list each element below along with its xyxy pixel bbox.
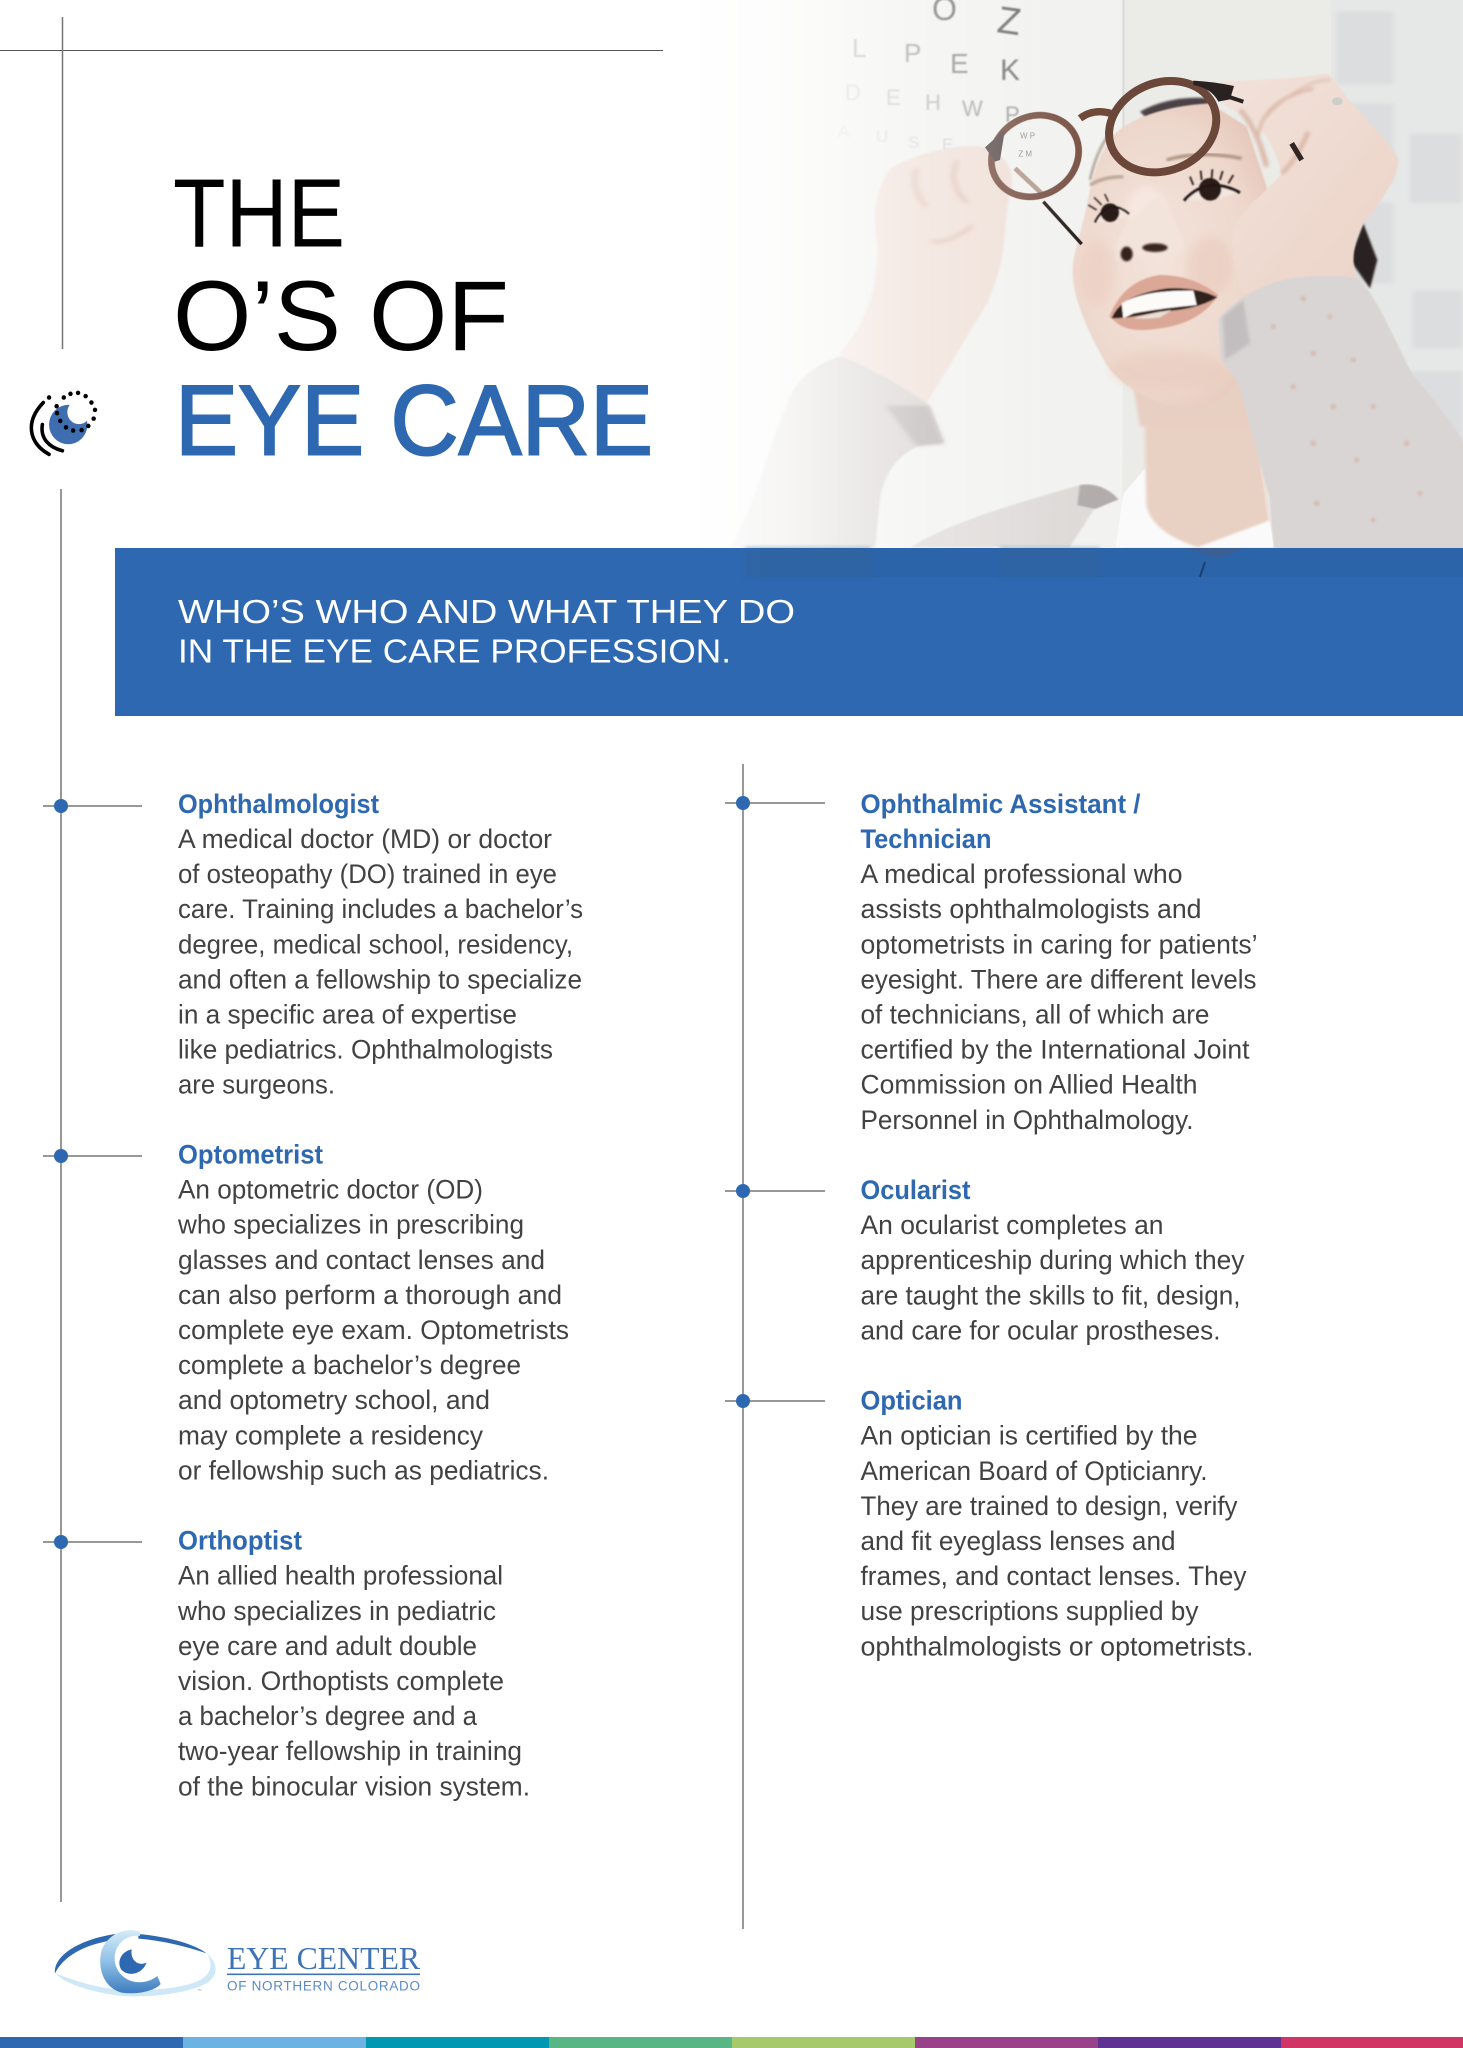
glasses lens letters: Z M: [1018, 150, 1032, 159]
text block: ocularist: Ocularist: [860, 1175, 971, 1205]
text block: optometrist: [177, 1140, 569, 1485]
photo strip inside banner: [745, 548, 1463, 577]
text block: optician: [860, 1386, 1254, 1661]
eye chart: P: [904, 38, 921, 68]
eye chart: S: [908, 133, 919, 152]
eye chart: A: [838, 122, 850, 141]
title: O’S OF: [173, 260, 509, 371]
text block: ophthalmologist: of osteopathy (DO) trained in eye: [178, 859, 557, 889]
eye chart: E: [950, 48, 969, 79]
text block: optician: frames, and contact lenses. They: [860, 1561, 1247, 1591]
text block: ophthalmologist: care. Training includes a bachelor’s: [178, 894, 583, 924]
text block: optometrist: or fellowship such as pediatrics.: [178, 1455, 549, 1485]
eye chart: P: [1005, 102, 1020, 127]
logo mark: [55, 1930, 216, 1996]
eye chart: [838, 0, 1024, 154]
text block: ophthalmologist: degree, medical school, residency,: [178, 929, 573, 959]
footer colour bar: [0, 2037, 1463, 2048]
eye chart: E: [886, 85, 901, 110]
marker: ocularist: [725, 1184, 825, 1198]
lower-left timeline rule: [60, 489, 62, 1902]
text block: optician: use prescriptions supplied by: [860, 1596, 1199, 1626]
marker: ophthalmic assistant: [725, 796, 825, 810]
hero photo: woman trying on glasses: [757, 0, 1463, 548]
text block: ophthalmic assistant / technician: [860, 789, 1258, 1135]
glasses lens letters: [1018, 132, 1035, 156]
text block: ophthalmic assistant / technician: Commission on Allied Health: [860, 1070, 1198, 1100]
cheek shading: [1086, 246, 1112, 299]
eye chart: E: [942, 135, 953, 154]
text block: ophthalmologist: in a specific area of expertise: [178, 1000, 517, 1030]
text block: ophthalmic assistant / technician: Technician: [860, 824, 992, 854]
eye chart: K: [1000, 54, 1020, 87]
text block: ophthalmologist: Ophthalmologist: [178, 789, 379, 819]
logo wordmark: [227, 1940, 421, 1994]
glasses: [976, 65, 1243, 244]
face shape: [1072, 102, 1268, 390]
logo wordmark: EYE CENTER: [227, 1940, 421, 1976]
left eye: [1088, 194, 1129, 222]
poster: [1331, 0, 1463, 618]
text block: ophthalmologist: are surgeons.: [178, 1070, 335, 1100]
marker: optician: [725, 1394, 825, 1408]
text block: ophthalmic assistant / technician: assists ophthalmologists and: [860, 894, 1202, 924]
marker: orthoptist: [43, 1535, 142, 1549]
text block: optometrist: glasses and contact lenses and: [178, 1245, 545, 1275]
marker: ophthalmologist: [43, 799, 142, 813]
eye chart: L: [852, 33, 866, 63]
text block: optometrist: who specializes in prescribing: [177, 1210, 524, 1240]
right eye: [1184, 169, 1240, 201]
text block: ophthalmic assistant / technician: certified by the International Joint: [860, 1035, 1250, 1065]
title: THE: [173, 158, 345, 268]
eye chart: Z: [995, 0, 1024, 44]
logo: Eye Center of Northern Colorado: [55, 1930, 421, 1996]
text block: orthoptist: vision. Orthoptists complete: [178, 1666, 504, 1696]
left hand and forearm: [839, 146, 1012, 404]
text block: optometrist: An optometric doctor (OD): [178, 1175, 483, 1205]
text block: optometrist: and optometry school, and: [178, 1385, 490, 1415]
text block: orthoptist: [177, 1526, 530, 1801]
text block: ophthalmologist: and often a fellowship to specialize: [178, 964, 582, 994]
text block: ophthalmologist: [178, 789, 583, 1100]
text block: optician: ophthalmologists or optometrists.: [860, 1631, 1254, 1661]
hand folds: [1240, 80, 1330, 173]
text block: optometrist: can also perform a thorough and: [178, 1280, 562, 1310]
text block: ocularist: are taught the skills to fit, design,: [860, 1280, 1240, 1310]
text block: ophthalmic assistant / technician: optometrists in caring for patients’: [860, 929, 1258, 959]
hair back: [1350, 223, 1377, 288]
icon: eye mark: [31, 391, 97, 454]
text block: orthoptist: eye care and adult double: [178, 1631, 477, 1661]
text block: orthoptist: two-year fellowship in training: [178, 1736, 522, 1766]
banner text: [178, 594, 795, 670]
logo wordmark: OF NORTHERN COLORADO: [227, 1978, 420, 1994]
text block: ophthalmic assistant / technician: A medical professional who: [860, 859, 1182, 889]
neck and collar: [1116, 468, 1274, 548]
logo mark: TM: [197, 1988, 202, 1992]
eye chart: H: [925, 90, 941, 115]
left sleeve: [800, 356, 943, 547]
wall board: [660, 0, 1123, 1163]
text block: orthoptist: a bachelor’s degree and a: [178, 1701, 478, 1731]
neck: [1133, 380, 1244, 428]
text block: optician: and fit eyeglass lenses and: [860, 1526, 1176, 1556]
face, hand, glasses close-up: [976, 65, 1463, 550]
text block: optometrist: complete eye exam. Optometrists: [178, 1315, 569, 1345]
banner text: IN THE EYE CARE PROFESSION.: [178, 634, 731, 670]
text block: ocularist: [860, 1175, 1245, 1345]
text block: orthoptist: Orthoptist: [178, 1526, 302, 1556]
lower body and left arm: [732, 146, 1274, 547]
text block: ocularist: An ocularist completes an: [860, 1210, 1164, 1240]
text block: ocularist: apprenticeship during which they: [860, 1245, 1245, 1275]
nose: [1119, 242, 1170, 263]
text block: ophthalmologist: A medical doctor (MD) or doctor: [178, 824, 552, 854]
text block: orthoptist: who specializes in pediatric: [177, 1596, 496, 1626]
banner text: WHO’S WHO AND WHAT THEY DO: [178, 594, 795, 631]
text block: ophthalmic assistant / technician: of technicians, all of which are: [860, 1000, 1210, 1030]
text block: ophthalmic assistant / technician: eyesight. There are different levels: [860, 964, 1256, 994]
right sleeve: [1218, 276, 1463, 550]
text block: optician: American Board of Opticianry.: [860, 1456, 1208, 1486]
text block: ophthalmologist: like pediatrics. Ophthalmologists: [178, 1035, 553, 1065]
glasses lens letters: W P: [1020, 131, 1035, 140]
right hand: [1222, 73, 1398, 295]
text block: orthoptist: of the binocular vision system.: [178, 1771, 530, 1801]
eye chart: U: [876, 127, 888, 146]
top vertical rule: [62, 17, 64, 349]
text block: optometrist: Optometrist: [178, 1140, 323, 1170]
title: EYE CARE: [175, 364, 653, 476]
smile: [1109, 275, 1218, 330]
text block: optician: They are trained to design, verify: [860, 1491, 1238, 1521]
text block: optometrist: complete a bachelor’s degree: [178, 1350, 521, 1380]
text block: optician: An optician is certified by the: [860, 1421, 1198, 1451]
text block: ophthalmic assistant / technician: Ophthalmic Assistant /: [860, 789, 1141, 819]
text block: optometrist: may complete a residency: [178, 1420, 483, 1450]
eyebrows: [1167, 155, 1242, 160]
eye chart: W: [962, 96, 983, 121]
banner: [115, 548, 1463, 716]
right timeline rule: [742, 764, 744, 1929]
text block: ophthalmic assistant / technician: Personnel in Ophthalmology.: [860, 1105, 1194, 1135]
text block: ocularist: and care for ocular prostheses.: [860, 1315, 1220, 1345]
mid sweater: [913, 485, 1094, 548]
marker: optometrist: [43, 1149, 142, 1163]
white fade over the left of the photo: [660, 0, 1080, 548]
title: [173, 158, 653, 476]
top horizontal rule: [0, 50, 663, 52]
text block: optician: Optician: [860, 1386, 962, 1416]
text block: orthoptist: An allied health professional: [178, 1561, 503, 1591]
eye chart: D: [845, 80, 861, 105]
